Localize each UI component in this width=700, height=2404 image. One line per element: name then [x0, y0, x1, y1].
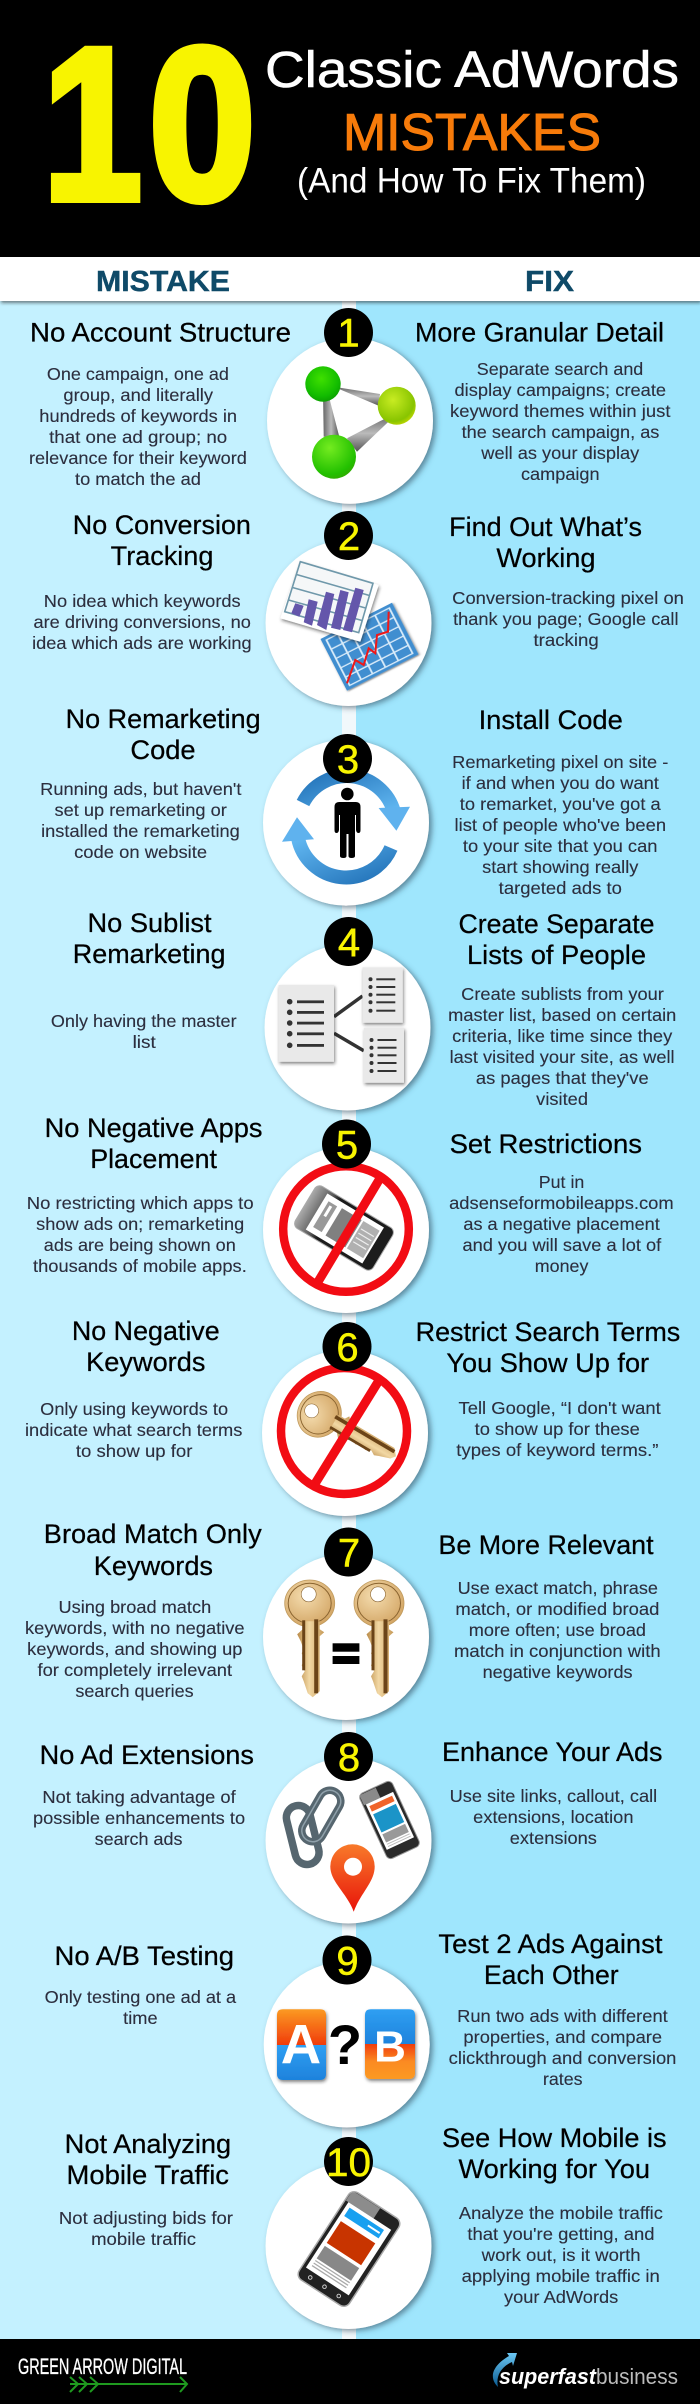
fix text 5: and you will save a lot of	[462, 1235, 661, 1255]
mistake text 8: search ads	[95, 1829, 183, 1849]
fix text 9: properties, and compare	[463, 2027, 662, 2047]
white circle 1	[267, 338, 433, 504]
fix text 4	[448, 984, 676, 1109]
fix text 10: work out, is it worth	[481, 2245, 641, 2265]
fix text 5: adsenseformobileapps.com	[449, 1193, 674, 1213]
fix text 1: well as your display	[480, 443, 640, 463]
purple bar chart	[280, 561, 379, 642]
fix text 5	[449, 1172, 674, 1276]
mistake text 6: indicate what search terms	[25, 1420, 243, 1440]
mistake heading 7: Broad Match Only	[44, 1519, 262, 1549]
mistake text 1	[29, 364, 247, 489]
mistake heading 3: Code	[130, 735, 196, 765]
icon: two keys equal	[285, 1580, 404, 1697]
fix text 10: your AdWords	[504, 2287, 619, 2307]
mistake text 8: possible enhancements to	[33, 1808, 245, 1828]
row 7	[25, 1519, 661, 1720]
fix text 8	[450, 1786, 657, 1848]
logo: Green Arrow Digital	[18, 2354, 187, 2392]
number badge 1	[324, 308, 373, 357]
fix text 5: as a negative placement	[463, 1214, 660, 1234]
fix text 4: visited	[536, 1089, 588, 1109]
background: mistake column	[0, 301, 342, 2340]
fix text 9: clickthrough and conversion	[449, 2048, 676, 2068]
fix heading 6: Restrict Search Terms	[416, 1317, 680, 1347]
logo: superfastbusiness: superfast	[499, 2364, 598, 2389]
fix text 4: criteria, like time since they	[452, 1026, 673, 1046]
mistake text 6	[25, 1399, 243, 1461]
mistake text 10	[59, 2208, 233, 2249]
number badge 3: 3	[337, 738, 359, 782]
fix text 2: tracking	[534, 630, 599, 650]
mistake heading 10: Mobile Traffic	[66, 2160, 229, 2190]
icon: key prohibited	[281, 1368, 407, 1494]
fix text 9: Run two ads with different	[457, 2006, 668, 2026]
number badge 9	[322, 1936, 372, 1984]
fix text 10	[459, 2203, 663, 2307]
fix text 4: last visited your site, as well	[450, 1047, 675, 1067]
fix text 9	[449, 2006, 676, 2089]
mistake text 8: Not taking advantage of	[42, 1787, 236, 1807]
fix text 1: campaign	[521, 464, 600, 484]
number badge 2: 2	[338, 515, 360, 559]
fix text 1: the search campaign, as	[462, 422, 660, 442]
number badge 4	[324, 917, 373, 966]
mistake text 4	[51, 1011, 237, 1052]
fix text 3	[452, 752, 668, 898]
mistake text 1: relevance for their keyword	[29, 448, 247, 468]
mistake heading 6: Keywords	[86, 1347, 205, 1377]
fix heading 6: You Show Up for	[446, 1348, 649, 1378]
fix text 10: Analyze the mobile traffic	[459, 2203, 663, 2223]
fix text 4: as pages that they've	[476, 1068, 649, 1088]
fix text 3: if and when you do want	[462, 773, 659, 793]
mistake text 3: Running ads, but haven't	[40, 779, 242, 799]
number badge 7	[324, 1528, 373, 1576]
tile B: B	[374, 2022, 406, 2072]
mistake heading 7: Keywords	[94, 1551, 213, 1581]
row 1	[29, 308, 671, 504]
mistake heading 1: No Account Structure	[30, 318, 291, 348]
mistake text 6: Only using keywords to	[40, 1399, 228, 1419]
fix text 7: more often; use broad	[469, 1620, 646, 1640]
fix text 4: master list, based on certain	[448, 1005, 676, 1025]
mistake text 1: group, and literally	[63, 385, 213, 405]
mistake text 5: No restricting which apps to	[27, 1193, 254, 1213]
column header band	[0, 257, 700, 301]
number badge 8: 8	[338, 1736, 360, 1780]
fix heading 8: Enhance Your Ads	[442, 1737, 662, 1767]
mistake text 10: mobile traffic	[91, 2229, 196, 2249]
fix text 8: extensions	[510, 1828, 597, 1848]
title line 1: Classic AdWords	[265, 41, 679, 98]
icon: charts	[280, 561, 418, 691]
fix heading 4	[458, 909, 654, 970]
mistake heading 4: Remarketing	[73, 939, 226, 969]
mistake text 5: ads are being shown on	[44, 1235, 236, 1255]
fix text 3: targeted ads to	[499, 878, 622, 898]
fix text 6: types of keyword terms.”	[456, 1440, 659, 1460]
fix heading 9: Each Other	[484, 1960, 619, 1990]
mistake text 4: Only having the master	[51, 1011, 237, 1031]
mistake text 9	[45, 1987, 236, 2028]
fix heading 2: Working	[496, 543, 596, 573]
mistake text 10: Not adjusting bids for	[59, 2208, 233, 2228]
fix text 1: display campaigns; create	[454, 380, 666, 400]
fix text 6: to show up for these	[475, 1419, 640, 1439]
white circle 2	[266, 540, 432, 706]
fix text 7: match in conjunction with	[454, 1641, 661, 1661]
row 9	[45, 1929, 676, 2128]
mistake text 3	[40, 779, 242, 862]
mistake heading 10: Not Analyzing	[65, 2129, 231, 2159]
fix text 3: to remarket, you've got a	[460, 794, 661, 814]
fix text 9: rates	[543, 2069, 583, 2089]
fix heading 10: Working for You	[458, 2154, 650, 2184]
mistake text 1: that one ad group; no	[49, 427, 227, 447]
mistake heading 10	[65, 2129, 231, 2190]
mistake heading 9: No A/B Testing	[54, 1941, 234, 1971]
mistake heading 2	[73, 510, 251, 571]
number badge 8	[324, 1732, 373, 1781]
fix text 3: to your site that you can	[463, 836, 658, 856]
fix text 10: applying mobile traffic in	[462, 2266, 660, 2286]
icon: master list and sublists	[279, 967, 404, 1083]
fix text 2: thank you page; Google call	[453, 609, 678, 629]
mistake text 5	[27, 1193, 254, 1276]
fix heading 2: Find Out What’s	[449, 512, 642, 542]
row 3	[40, 704, 668, 906]
fix text 3: list of people who've been	[454, 815, 666, 835]
blue line chart	[320, 603, 418, 691]
fix text 1	[450, 359, 671, 484]
fix text 6	[456, 1398, 661, 1460]
white circle 9	[264, 1962, 430, 2128]
fix text 6: Tell Google, “I don't want	[458, 1398, 661, 1418]
number badge 1: 1	[337, 312, 360, 356]
logo: superfastbusiness	[493, 2353, 678, 2389]
fix text 5: money	[535, 1256, 589, 1276]
icon: map pin	[330, 1844, 375, 1912]
mistake heading 2: Tracking	[111, 541, 213, 571]
central spine	[342, 301, 356, 2340]
fix text 7: negative keywords	[483, 1662, 633, 1682]
icon: phone prohibited	[283, 1166, 409, 1292]
mistake text 2	[32, 591, 252, 653]
white circle 10	[266, 2163, 432, 2329]
title number 10: 0	[149, 3, 256, 245]
icon: mobile phone	[296, 2189, 402, 2309]
mistake text 7: search queries	[75, 1681, 194, 1701]
column heading: fix: FIX	[525, 266, 575, 298]
fix text 4: Create sublists from your	[461, 984, 664, 1004]
title line 3: (And How To Fix Them)	[297, 162, 646, 201]
mistake text 8	[33, 1787, 245, 1849]
number badge 6: 6	[336, 1326, 359, 1370]
mistake text 2: No idea which keywords	[44, 591, 241, 611]
title line 2: MISTAKES	[343, 104, 601, 162]
fix text 3: start showing really	[482, 857, 639, 877]
white circle 8	[266, 1758, 432, 1924]
mistake text 7: for completely irrelevant	[38, 1660, 232, 1680]
number badge 4: 4	[338, 921, 360, 965]
mistake text 3: set up remarketing or	[54, 800, 227, 820]
mistake text 3: installed the remarketing	[41, 821, 240, 841]
mistake text 1: hundreds of keywords in	[39, 406, 237, 426]
fix heading 10	[442, 2123, 667, 2184]
fix text 10: that you're getting, and	[467, 2224, 654, 2244]
row 8	[33, 1732, 662, 1924]
fix heading 9: Test 2 Ads Against	[438, 1929, 663, 1959]
tile A: A	[281, 2012, 321, 2076]
mistake heading 3	[66, 704, 261, 765]
logo: Green Arrow Digital: GREEN ARROW DIGITAL	[18, 2354, 187, 2379]
fix heading 10: See How Mobile is	[442, 2123, 667, 2153]
mistake heading 5	[45, 1113, 262, 1174]
mistake text 5: show ads on; remarketing	[36, 1214, 244, 1234]
fix text 7	[454, 1578, 661, 1682]
header panel	[0, 0, 700, 256]
fix text 5: Put in	[539, 1172, 584, 1192]
mistake text 3: code on website	[74, 842, 207, 862]
mistake heading 4: No Sublist	[88, 908, 212, 938]
mistake text 5: thousands of mobile apps.	[33, 1256, 247, 1276]
white circle 4	[264, 944, 430, 1110]
mistake text 1: One campaign, one ad	[47, 364, 229, 384]
icon: A or B tiles	[277, 2009, 415, 2080]
icon: chain link	[284, 1786, 345, 1867]
white circle 7	[263, 1554, 429, 1720]
number badge 3	[323, 734, 372, 783]
icon: person in cycle arrows	[282, 776, 410, 877]
mistake text 7: keywords, and showing up	[27, 1639, 242, 1659]
row 5	[27, 1113, 674, 1313]
fix text 8: Use site links, callout, call	[450, 1786, 657, 1806]
number badge 10: 10	[326, 2141, 371, 2185]
mistake text 9: time	[123, 2008, 158, 2028]
white circle 3	[263, 740, 429, 906]
mistake heading 7	[44, 1519, 262, 1581]
fix text 1: Separate search and	[477, 359, 643, 379]
mistake text 9: Only testing one ad at a	[45, 1987, 236, 2007]
footer panel	[0, 2339, 700, 2404]
mistake heading 4	[73, 908, 226, 969]
fix heading 7: Be More Relevant	[438, 1530, 654, 1560]
mistake heading 6: No Negative	[72, 1316, 220, 1346]
number badge 9: 9	[336, 1940, 359, 1984]
row 2	[32, 510, 684, 706]
fix text 2	[452, 588, 684, 650]
mistake heading 5: No Negative Apps	[45, 1113, 262, 1143]
mistake text 7	[25, 1597, 245, 1701]
fix heading 9	[438, 1929, 663, 1990]
mistake text 6: to show up for	[76, 1441, 193, 1461]
title number 10	[43, 3, 256, 245]
fix heading 5: Set Restrictions	[450, 1129, 642, 1159]
fix text 2: Conversion-tracking pixel on	[452, 588, 684, 608]
fix text 7: match, or modified broad	[455, 1599, 659, 1619]
fix text 7: Use exact match, phrase	[458, 1578, 658, 1598]
mistake text 1: to match the ad	[75, 469, 201, 489]
white circle 5	[263, 1147, 429, 1313]
mistake text 2: are driving conversions, no	[34, 612, 251, 632]
white circle 6	[262, 1350, 428, 1516]
mistake heading 8: No Ad Extensions	[40, 1740, 254, 1770]
mistake text 4: list	[133, 1032, 156, 1052]
mistake heading 3: No Remarketing	[66, 704, 261, 734]
fix heading 6	[416, 1317, 680, 1378]
mistake text 7: keywords, with no negative	[25, 1618, 245, 1638]
number badge 7: 7	[338, 1532, 360, 1576]
column heading: mistake: MISTAKE	[96, 266, 230, 298]
icon: molecule	[305, 366, 416, 479]
fix text 3: Remarketing pixel on site -	[452, 752, 668, 772]
row 10	[59, 2123, 667, 2329]
mistake text 7: Using broad match	[58, 1597, 211, 1617]
number badge 6	[322, 1322, 372, 1371]
mistake heading 6	[72, 1316, 220, 1377]
fix heading 1: More Granular Detail	[415, 318, 664, 348]
row 6	[25, 1316, 680, 1516]
icon: phone	[358, 1780, 421, 1860]
fix text 8: extensions, location	[473, 1807, 634, 1827]
fix heading 4: Lists of People	[467, 940, 646, 970]
question mark: ?	[328, 2013, 362, 2076]
number badge 5: 5	[336, 1124, 358, 1168]
fix heading 4: Create Separate	[458, 909, 654, 939]
background: fix column	[356, 301, 700, 2340]
mistake heading 2: No Conversion	[73, 510, 251, 540]
fix heading 3: Install Code	[479, 705, 623, 735]
logo: superfastbusiness: business	[596, 2364, 678, 2389]
fix text 1: keyword themes within just	[450, 401, 671, 421]
number badge 2	[324, 511, 373, 560]
number badge 5	[322, 1120, 371, 1168]
mistake heading 5: Placement	[90, 1144, 217, 1174]
title number 10: 1	[43, 3, 142, 245]
row 4	[51, 908, 676, 1110]
mistake text 2: idea which ads are working	[32, 633, 252, 653]
fix heading 2	[449, 512, 642, 573]
